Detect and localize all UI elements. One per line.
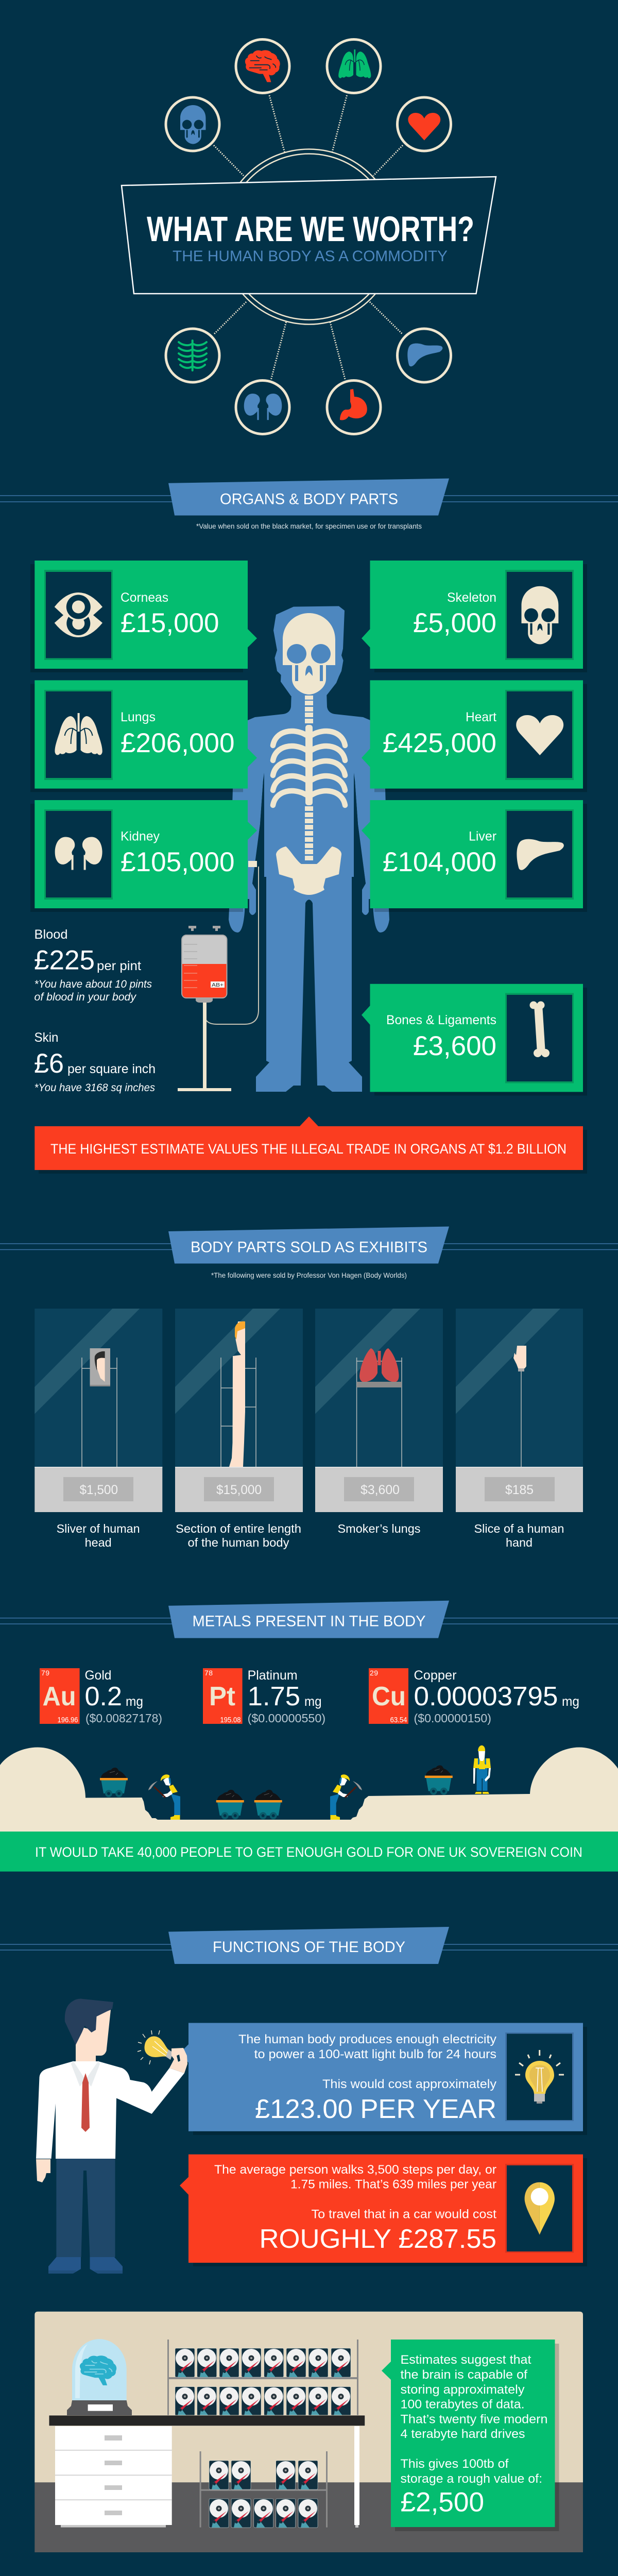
mine: second miner with pickaxe	[330, 1774, 362, 1820]
panel: lungs: Lungs	[121, 710, 156, 724]
panel: brain value: storing approximately	[401, 2383, 524, 2397]
note: von hagen: *The following were sold by Professor Von Hagen (Body Worlds)	[211, 1271, 407, 1279]
metal: copper: 29	[370, 1669, 378, 1677]
section heading: organs and body parts	[0, 479, 618, 515]
panel: liver	[362, 800, 587, 912]
mine: ground	[0, 1748, 618, 1832]
metal: gold: 0.2	[84, 1682, 122, 1711]
callout: illegal organ trade: THE HIGHEST ESTIMATE VALUES THE ILLEGAL TRADE IN ORGANS AT $1.2 BILLION	[50, 1141, 566, 1157]
section heading: functions of the body	[0, 1927, 618, 1964]
panel: brain value: 4 terabyte hard drives	[401, 2427, 525, 2441]
icon: stomach	[340, 389, 367, 420]
text block: skin: *You have 3168 sq inches	[34, 1082, 155, 1094]
panel: brain value: the brain is capable of	[401, 2368, 527, 2382]
icon: map pin	[525, 2182, 555, 2235]
mine: standing miner	[473, 1745, 491, 1794]
section heading: metals present in the body	[0, 1601, 618, 1638]
metal: gold: Gold	[84, 1668, 111, 1683]
icon: liver	[407, 343, 442, 366]
metal: gold: ($0.00827178)	[85, 1711, 162, 1725]
lower shelf with hard drives	[200, 2451, 328, 2528]
icon: heart	[408, 113, 440, 140]
hero: organ icon wheel	[166, 39, 451, 434]
human body figure	[229, 606, 389, 1092]
panel: skeleton	[362, 561, 587, 672]
icon: skull	[521, 586, 558, 644]
metal: gold: 196.96	[58, 1716, 78, 1724]
upper shelf with hard drives	[167, 2340, 358, 2416]
text block: blood: *You have about 10 pints	[34, 978, 152, 990]
icon: light bulb	[515, 2050, 564, 2104]
metal: platinum: 78	[204, 1669, 213, 1677]
panel: brain storage scene	[35, 2312, 583, 2552]
man holding light bulb	[36, 1999, 187, 2274]
panel: corneas: £15,000	[121, 608, 219, 638]
panel: heart	[362, 680, 587, 792]
exhibit: sliver of human head: $1,500	[79, 1483, 118, 1497]
panel: lungs	[30, 680, 257, 792]
exhibit: sliver of human head	[35, 1309, 162, 1549]
metal: platinum: mg	[304, 1693, 321, 1709]
exhibit: section of entire body: $15,000	[216, 1483, 262, 1497]
panel: skeleton: £5,000	[413, 608, 496, 638]
text block: blood: per pint	[97, 959, 141, 973]
panel: walking: To travel that in a car would cost	[311, 2208, 496, 2222]
panel: electricity	[179, 2023, 587, 2135]
mine: carts	[100, 1765, 453, 1819]
exhibit: slice of a human hand: Slice of a human	[474, 1522, 564, 1535]
metal: platinum: 195.08	[220, 1716, 241, 1724]
metal: platinum: ($0.00000550)	[248, 1711, 325, 1725]
panel: brain value: 100 terabytes of data.	[401, 2398, 524, 2411]
icon: brain	[245, 50, 280, 82]
panel: heart: £425,000	[383, 728, 496, 758]
figure: spine and ribs	[273, 696, 345, 860]
panel: kidney: £105,000	[121, 847, 235, 877]
text block: skin	[34, 1030, 156, 1094]
figure: skull	[283, 613, 335, 694]
metal: copper: Copper	[414, 1668, 456, 1683]
callout: illegal organ trade	[35, 1116, 587, 1174]
metal: copper: mg	[562, 1693, 579, 1709]
metal: gold: 79	[41, 1669, 49, 1677]
subtitle: THE HUMAN BODY AS A COMMODITY	[173, 248, 448, 265]
icon: lungs	[55, 713, 102, 755]
panel: electricity: This would cost approximately	[322, 2077, 496, 2091]
panel: skeleton: Skeleton	[447, 590, 496, 605]
text block: blood	[34, 927, 152, 1003]
small glowing bulb	[138, 2030, 173, 2064]
panel: walking: ROUGHLY £287.55	[260, 2224, 496, 2254]
section heading: body parts sold as exhibits: BODY PARTS SOLD AS EXHIBITS	[191, 1239, 427, 1256]
panel: bones and ligaments	[362, 984, 587, 1095]
panel: walking: The average person walks 3,500 steps per day, or	[214, 2163, 496, 2177]
exhibit: smoker's lungs: Smoker’s lungs	[338, 1522, 420, 1535]
panel: corneas	[30, 561, 257, 672]
panel: walking: 1.75 miles. That’s 639 miles per year	[290, 2177, 496, 2192]
panel: kidney: Kidney	[121, 829, 160, 844]
metal: platinum: Pt	[209, 1682, 235, 1711]
metal: copper: 0.00003795	[414, 1682, 558, 1711]
text block: skin: £6	[34, 1048, 64, 1079]
note: black market value: *Value when sold on the black market, for specimen use or for transplants	[196, 522, 422, 530]
panel: brain value: That’s twenty five modern	[401, 2413, 548, 2427]
panel: liver: £104,000	[383, 847, 496, 877]
panel: corneas: Corneas	[121, 590, 168, 605]
panel: brain value: Estimates suggest that	[401, 2353, 531, 2367]
text block: blood: Blood	[34, 927, 68, 942]
mine: miner with pickaxe	[148, 1774, 180, 1820]
exhibit: slice of a human hand: $185	[505, 1483, 534, 1497]
IV blood bag and stand	[178, 861, 259, 1091]
brain in a jar	[67, 2339, 132, 2415]
icon: skull	[180, 105, 205, 144]
panel: brain value	[382, 2340, 559, 2531]
icon: kidneys	[55, 837, 102, 870]
metal: platinum: 1.75	[248, 1682, 300, 1711]
exhibit: sliver of human head: Sliver of human	[57, 1522, 140, 1535]
exhibit: section of entire body: of the human body	[187, 1536, 289, 1549]
callout: sovereign coin	[0, 1832, 618, 1872]
text block: blood: £225	[34, 945, 95, 976]
panel: bones and ligaments: Bones & Ligaments	[386, 1013, 496, 1027]
panel: brain value: This gives 100tb of	[401, 2457, 509, 2471]
section heading: functions of the body: FUNCTIONS OF THE BODY	[213, 1939, 405, 1956]
panel: electricity: The human body produces enough electricity	[238, 2032, 496, 2046]
figure: pelvis	[276, 846, 341, 895]
figure: head	[273, 606, 345, 696]
metal: gold: mg	[126, 1693, 143, 1709]
title: WHAT ARE WE WORTH?	[147, 209, 474, 249]
panel: heart: Heart	[466, 710, 496, 724]
panel: electricity: £123.00 PER YEAR	[255, 2094, 496, 2124]
exhibit: sliver of human head: head	[85, 1536, 112, 1549]
exhibit: section of entire body	[175, 1309, 303, 1549]
text block: skin: per square inch	[67, 1062, 156, 1076]
metal: copper: 63.54	[390, 1716, 407, 1724]
section heading: body parts sold as exhibits	[0, 1227, 618, 1263]
exhibit: slice of a human hand	[456, 1309, 583, 1549]
icon: bone	[529, 1002, 550, 1057]
icon: ribcage	[179, 341, 207, 370]
IV blood bag and stand: AB+	[212, 982, 224, 988]
panel: liver: Liver	[469, 829, 496, 844]
metal: platinum: Platinum	[248, 1668, 298, 1683]
panel: lungs: £206,000	[121, 728, 235, 758]
section heading: organs and body parts: ORGANS & BODY PARTS	[220, 491, 398, 508]
metal: gold	[40, 1668, 162, 1725]
panel: electricity: to power a 100-watt light bulb for 24 hours	[254, 2047, 496, 2061]
metal: platinum	[203, 1668, 325, 1725]
callout: sovereign coin: IT WOULD TAKE 40,000 PEOPLE TO GET ENOUGH GOLD FOR ONE UK SOVEREIGN COIN	[35, 1844, 582, 1860]
exhibit: section of entire body: Section of entire length	[176, 1522, 301, 1535]
metal: gold: Au	[42, 1682, 76, 1711]
icon: eyes	[55, 592, 102, 637]
metal: copper: ($0.00000150)	[414, 1711, 491, 1725]
exhibit: smoker's lungs: $3,600	[360, 1483, 400, 1497]
exhibit: slice of a human hand: hand	[506, 1536, 533, 1549]
text block: skin: Skin	[34, 1030, 59, 1045]
icon: lungs	[338, 49, 371, 78]
icon: heart	[516, 715, 563, 755]
metal: copper	[369, 1668, 579, 1725]
title panel	[122, 177, 496, 294]
icon: kidneys	[244, 394, 282, 420]
metal: copper: Cu	[372, 1682, 406, 1711]
desk and drawers	[49, 2415, 365, 2528]
panel: kidney	[30, 800, 257, 912]
panel: brain value: £2,500	[401, 2487, 484, 2517]
exhibit: smoker's lungs	[315, 1309, 443, 1535]
text block: blood: of blood in your body	[34, 991, 137, 1003]
panel: brain value: storage a rough value of:	[401, 2472, 542, 2486]
section heading: metals present in the body: METALS PRESENT IN THE BODY	[193, 1613, 425, 1630]
panel: bones and ligaments: £3,600	[413, 1031, 496, 1061]
icon: liver	[517, 839, 564, 870]
panel: walking	[180, 2155, 587, 2266]
